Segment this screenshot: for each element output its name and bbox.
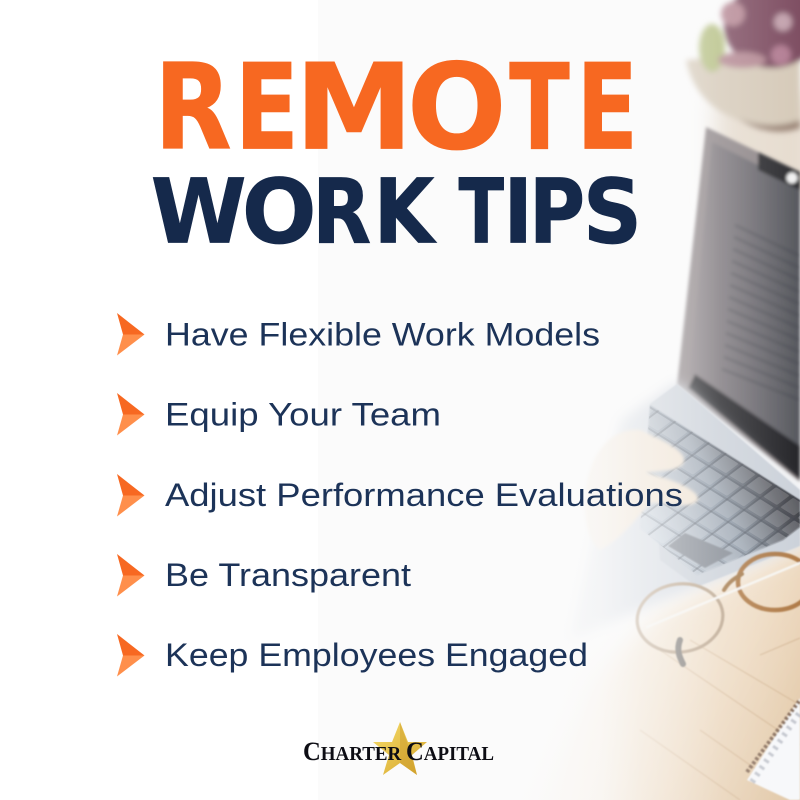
title line: REMOTE: M	[295, 39, 413, 177]
title line: WORK TIPS: I	[503, 160, 533, 264]
title line: WORK TIPS: O	[242, 160, 317, 264]
tip 2	[117, 393, 441, 436]
tip 1: Have Flexible Work Models	[165, 316, 600, 352]
glasses	[633, 554, 800, 664]
tip 4: Be Transparent	[165, 557, 411, 593]
tip 5: Keep Employees Engaged	[165, 637, 588, 673]
title line: WORK TIPS: R	[312, 160, 371, 264]
title line: REMOTE: E	[235, 39, 299, 177]
laptop screen	[677, 127, 800, 482]
notebook	[747, 698, 800, 800]
title line: REMOTE: T	[509, 39, 570, 177]
title line: WORK TIPS: W	[151, 160, 247, 264]
tip 4	[117, 554, 411, 596]
tips list	[117, 313, 683, 676]
title line: REMOTE: R	[154, 39, 232, 177]
logo wordmark: CHARTER CAPITAL	[303, 737, 494, 766]
title line: WORK TIPS: K	[374, 160, 438, 264]
tip 1	[117, 313, 600, 356]
desk surface	[520, 95, 800, 800]
icon: gold star	[373, 722, 427, 775]
tip 5	[117, 634, 588, 676]
bowl of grapes	[686, 0, 800, 132]
laptop base and keyboard	[570, 382, 800, 640]
title line: WORK TIPS: P	[529, 160, 585, 264]
Charter Capital logo	[303, 722, 494, 775]
title line: REMOTE: O	[407, 39, 506, 177]
tip 3	[117, 474, 683, 516]
tip 3: Adjust Performance Evaluations	[165, 477, 683, 513]
tip 2: Equip Your Team	[165, 396, 441, 432]
title line: REMOTE: E	[576, 39, 638, 177]
title line: WORK TIPS: S	[583, 160, 642, 264]
hands on keyboard	[585, 430, 698, 550]
title line: WORK TIPS: T	[458, 160, 504, 264]
title	[151, 39, 642, 264]
